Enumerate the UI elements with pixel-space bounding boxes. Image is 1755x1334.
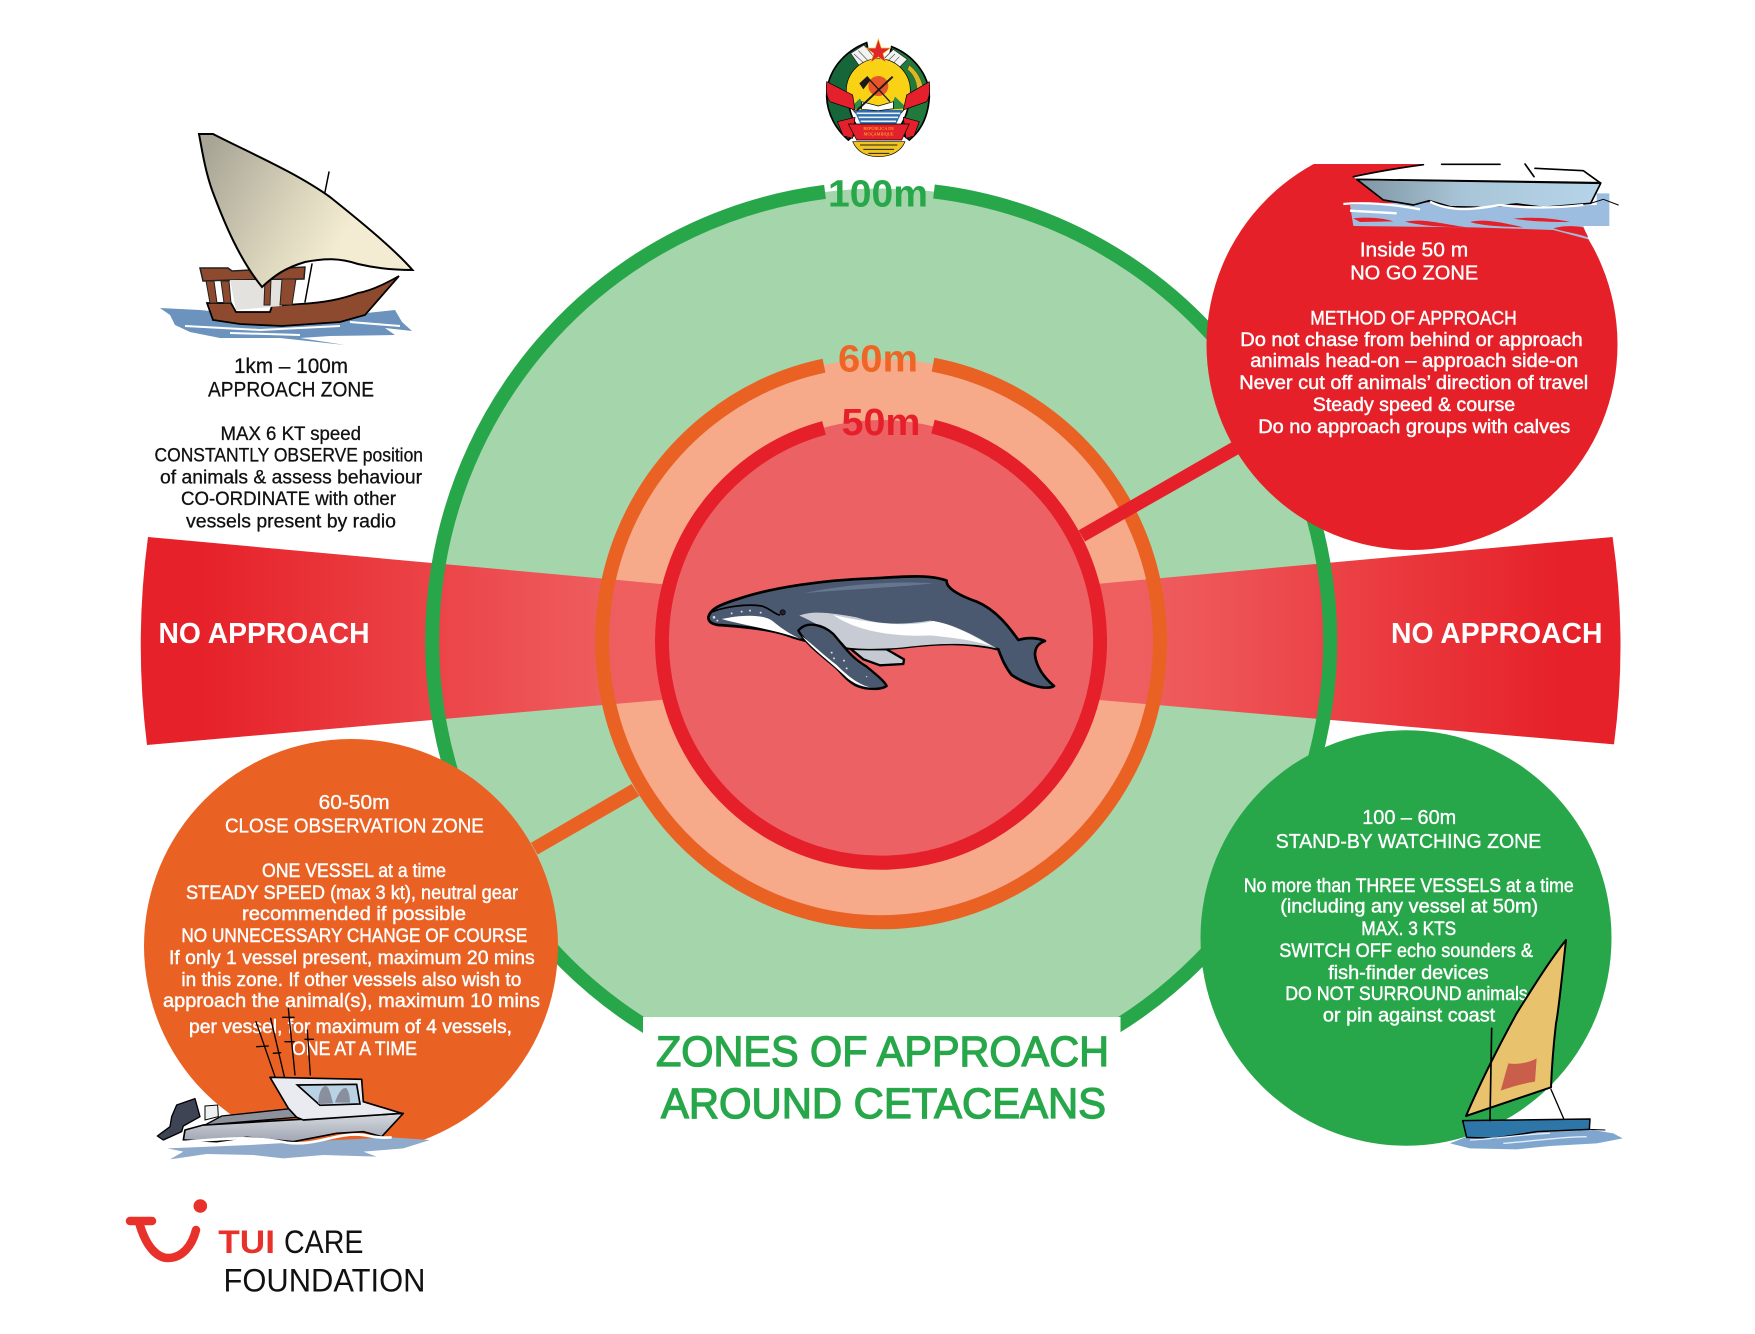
outrigger rods bbox=[256, 1008, 313, 1077]
water bbox=[1450, 1130, 1623, 1149]
whale belly marking bbox=[799, 613, 997, 649]
cabin posts bbox=[206, 279, 296, 305]
heading: 60-50m bbox=[319, 791, 390, 814]
body text: ONE VESSEL at a time bbox=[262, 861, 446, 882]
no approach sector: right bbox=[1085, 537, 1621, 744]
lower ribbon bbox=[837, 117, 919, 138]
heading bbox=[208, 355, 374, 402]
body text bbox=[1244, 876, 1574, 1026]
zone fill: 100m stand-by zone bbox=[432, 188, 1330, 1094]
zone fill: 60m close observation zone bbox=[602, 359, 1160, 923]
rifle bbox=[857, 77, 893, 111]
water highlights bbox=[1470, 1133, 1587, 1143]
body text: CO-ORDINATE with other bbox=[181, 489, 397, 510]
illustration: fishing boat bbox=[157, 1008, 450, 1173]
logo text: TUI: TUI bbox=[218, 1224, 275, 1260]
whale mouth line bbox=[713, 605, 779, 615]
body text: of animals & assess behaviour bbox=[160, 468, 423, 488]
tow line bbox=[1591, 199, 1618, 205]
panel circle bbox=[144, 739, 558, 1153]
hull bbox=[1463, 1119, 1590, 1138]
illustration: dhow bbox=[160, 134, 412, 345]
water streaks bbox=[185, 322, 400, 335]
hull bbox=[207, 276, 399, 326]
body text: per vessel, for maximum of 4 vessels, bbox=[189, 1017, 512, 1038]
wave bbox=[177, 1135, 392, 1143]
star bbox=[866, 39, 891, 63]
panel: no go zone bbox=[1206, 139, 1618, 550]
illustration: sailing boat bbox=[1450, 940, 1623, 1149]
ring: 60m bbox=[602, 365, 1160, 922]
logo text: CARE: CARE bbox=[284, 1224, 364, 1260]
connector: no go zone bbox=[1078, 442, 1239, 542]
logo text: FOUNDATION: FOUNDATION bbox=[224, 1262, 426, 1298]
body text: STEADY SPEED (max 3 kt), neutral gear bbox=[186, 883, 519, 904]
zone diagram: concentric approach circles bbox=[141, 174, 1621, 1137]
sail bbox=[1466, 940, 1566, 1116]
wing lines bbox=[854, 51, 899, 65]
body text bbox=[154, 424, 423, 532]
mast bbox=[1490, 1028, 1492, 1121]
whale skin dots bbox=[713, 610, 867, 677]
ribbon left bbox=[826, 82, 855, 110]
green land bbox=[849, 97, 907, 109]
label: 50m: 50m bbox=[842, 402, 920, 444]
title: AROUND CETACEANS bbox=[661, 1080, 1106, 1128]
whale back highlight bbox=[803, 583, 933, 593]
logo smile bbox=[130, 1221, 196, 1258]
whale rear flipper bbox=[850, 648, 904, 665]
panel: approach zone bbox=[154, 134, 423, 532]
zone fill: 50m no go zone bbox=[662, 420, 1100, 863]
label: no approach right: NO APPROACH bbox=[1391, 618, 1602, 650]
title bbox=[656, 1028, 1109, 1128]
heading: STAND-BY WATCHING ZONE bbox=[1276, 830, 1541, 853]
sun disc bbox=[846, 59, 910, 123]
ribbon right bbox=[903, 82, 930, 110]
body text: If only 1 vessel present, maximum 20 mins bbox=[169, 948, 535, 969]
water red gaps bbox=[1353, 218, 1588, 237]
cabin top bbox=[1353, 164, 1600, 183]
cabin lines bbox=[1353, 164, 1601, 183]
hoe bbox=[867, 77, 890, 102]
outboard motor bbox=[157, 1099, 200, 1140]
wreath right bbox=[888, 47, 929, 140]
mast stay bbox=[305, 264, 312, 302]
sail patch bbox=[1501, 1058, 1537, 1091]
body text: SWITCH OFF echo sounders & bbox=[1279, 941, 1533, 962]
body text: recommended if possible bbox=[242, 904, 466, 925]
body text: approach the animal(s), maximum 10 mins bbox=[163, 991, 540, 1012]
sun centre bbox=[868, 76, 888, 96]
panel: close observation zone bbox=[144, 739, 558, 1173]
illustration: speedboat bbox=[1343, 164, 1618, 239]
water bbox=[160, 308, 412, 345]
body text: METHOD OF APPROACH bbox=[1310, 309, 1517, 330]
ring: 50m bbox=[662, 427, 1100, 863]
body text: animals head-on – approach side-on bbox=[1250, 351, 1578, 372]
cabin interior bbox=[230, 280, 285, 310]
heading: Inside 50 m bbox=[1360, 238, 1468, 262]
windows bbox=[297, 1084, 360, 1105]
body text: DO NOT SURROUND animals bbox=[1285, 984, 1528, 1005]
panel: stand-by watching zone bbox=[1200, 730, 1623, 1149]
book bbox=[862, 102, 893, 111]
body text: fish-finder devices bbox=[1328, 963, 1489, 984]
whale jaw bbox=[722, 616, 802, 639]
rear deck bbox=[205, 1108, 297, 1125]
title backing cut-out bbox=[643, 1017, 1120, 1137]
label: no approach left: NO APPROACH bbox=[158, 618, 370, 650]
mast tip bbox=[325, 172, 329, 192]
whale flipper highlight bbox=[802, 636, 872, 688]
label: 100m: 100m bbox=[828, 174, 928, 216]
body text: No more than THREE VESSELS at a time bbox=[1244, 876, 1574, 897]
water bbox=[167, 1137, 430, 1159]
body text: MAX 6 KT speed bbox=[220, 424, 361, 445]
body text: CONSTANTLY OBSERVE position bbox=[154, 446, 423, 466]
title: ZONES OF APPROACH bbox=[656, 1028, 1109, 1076]
sail bbox=[199, 134, 412, 287]
body text bbox=[1239, 309, 1588, 438]
whale pectoral flipper bbox=[798, 625, 887, 689]
heading: 100 – 60m bbox=[1362, 806, 1456, 829]
hull bbox=[1357, 179, 1601, 207]
body text: or pin against coast bbox=[1323, 1006, 1496, 1026]
icon: Mozambique coat of arms bbox=[826, 39, 930, 157]
white mask under the boat bbox=[160, 1147, 450, 1173]
whale body bbox=[708, 576, 1054, 688]
knot lines bbox=[860, 145, 897, 153]
body text: NO UNNECESSARY CHANGE OF COURSE bbox=[181, 926, 527, 947]
heading: 1km – 100m bbox=[234, 355, 348, 378]
waves bbox=[1343, 202, 1583, 213]
heading: NO GO ZONE bbox=[1350, 262, 1478, 284]
body text: Do not chase from behind or approach bbox=[1240, 330, 1583, 351]
hull tail bbox=[1589, 1128, 1605, 1131]
heading bbox=[1276, 806, 1541, 853]
heading: CLOSE OBSERVATION ZONE bbox=[225, 814, 484, 838]
stern box bbox=[205, 1105, 218, 1120]
body text: vessels present by radio bbox=[186, 512, 396, 532]
panel circle bbox=[1206, 139, 1618, 550]
body text: Steady speed & course bbox=[1313, 395, 1515, 416]
whale eye bbox=[780, 610, 785, 615]
cabin bbox=[270, 1077, 402, 1120]
icon: humpback whale bbox=[708, 576, 1054, 689]
hoe blade bbox=[859, 76, 871, 89]
body text: (including any vessel at 50m) bbox=[1280, 896, 1538, 918]
heading bbox=[225, 791, 484, 838]
body text: Do no approach groups with calves bbox=[1258, 417, 1570, 438]
banner text bbox=[863, 126, 894, 137]
banner text: MOÇAMBIQUE bbox=[864, 132, 894, 137]
crew bbox=[318, 1086, 350, 1104]
ring: 100m bbox=[432, 192, 1330, 1094]
body text: Never cut off animals’ direction of travel bbox=[1239, 373, 1588, 394]
heading: APPROACH ZONE bbox=[208, 378, 374, 402]
knot bbox=[853, 142, 905, 157]
no approach sector: left bbox=[141, 537, 680, 745]
connector: close observation zone bbox=[531, 784, 639, 855]
body text: in this zone. If other vessels also wish to bbox=[181, 970, 521, 991]
label: 60m: 60m bbox=[838, 338, 918, 380]
body text: ONE AT A TIME bbox=[292, 1039, 417, 1060]
white wings bbox=[851, 45, 907, 69]
wheat bbox=[907, 65, 924, 104]
wreath left bbox=[827, 43, 870, 140]
whale belly highlight bbox=[833, 615, 992, 646]
body text: MAX. 3 KTS bbox=[1361, 919, 1456, 940]
body text bbox=[163, 861, 540, 1060]
panel circle bbox=[1200, 730, 1612, 1146]
water bbox=[854, 110, 903, 125]
rigging bbox=[1551, 1089, 1564, 1119]
cabin roof bbox=[200, 267, 305, 281]
logo: TUI Care Foundation bbox=[130, 1199, 426, 1298]
water bbox=[1350, 193, 1609, 239]
heading bbox=[1350, 238, 1478, 284]
logo dot bbox=[194, 1199, 207, 1213]
banner bbox=[848, 124, 909, 140]
banner text: REPÚBLICA DE bbox=[863, 126, 894, 131]
water stripes bbox=[857, 113, 900, 121]
hull bbox=[183, 1113, 403, 1142]
